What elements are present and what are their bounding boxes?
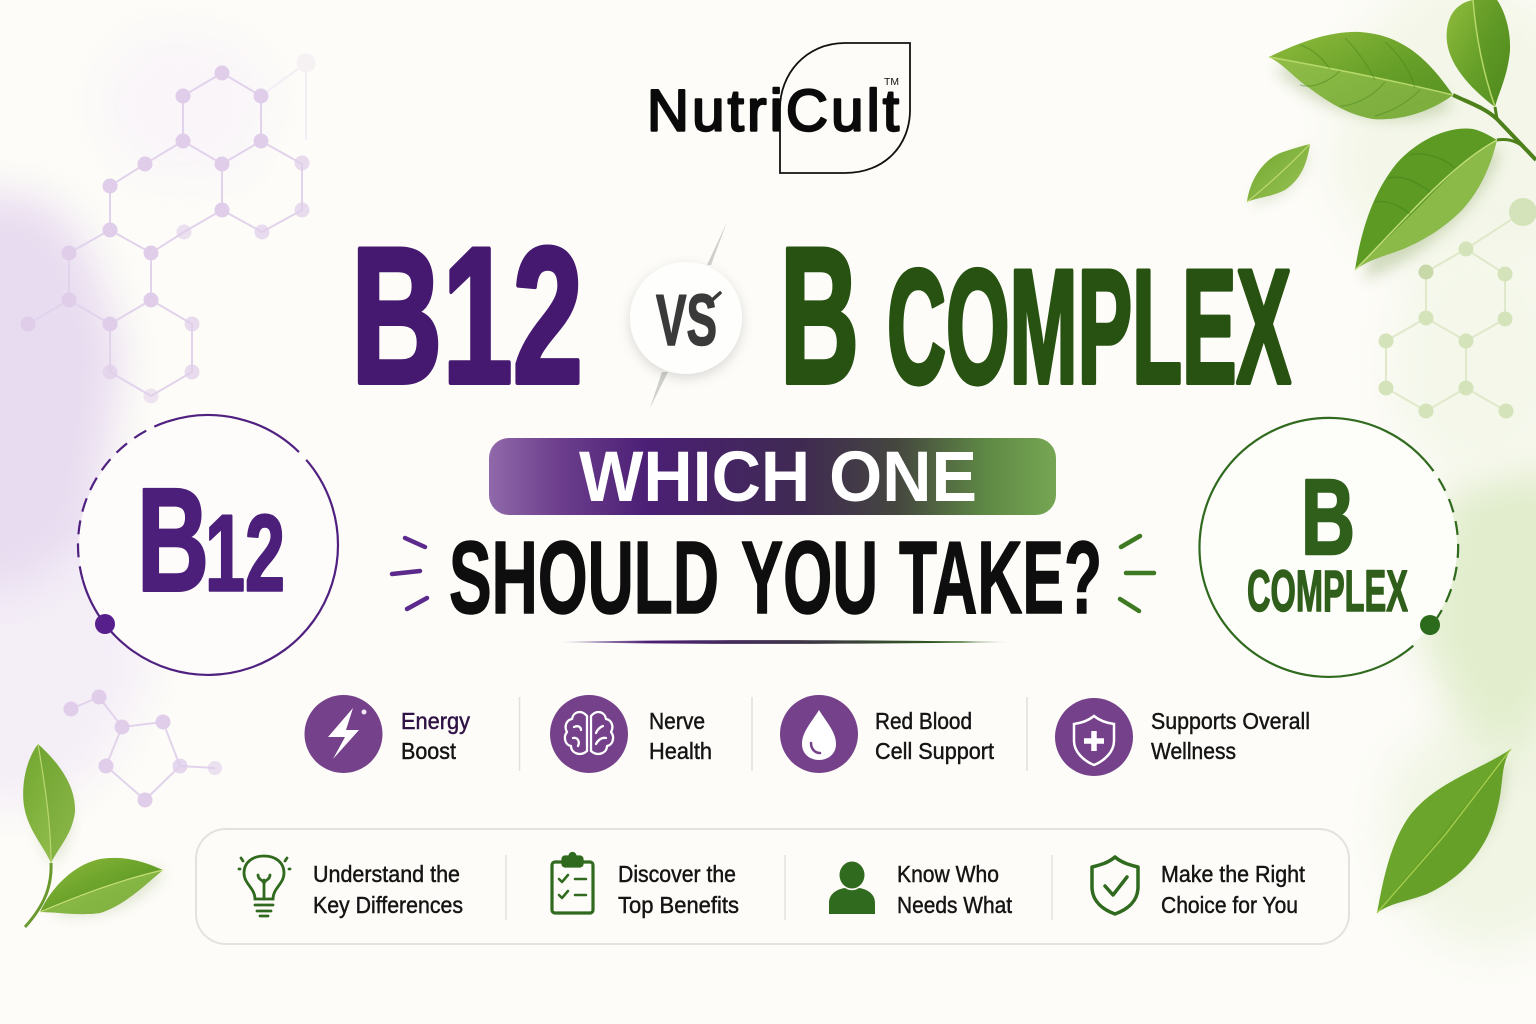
logo: NutriCult: NutriCult: [647, 78, 899, 144]
benefit: energy boost: [304, 695, 470, 773]
benefit: supports overall wellness: Wellness: [1151, 738, 1236, 764]
accent dashes: green: [1120, 536, 1154, 611]
vs badge: [630, 222, 742, 408]
highlight: key differences: Key Differences: [313, 892, 463, 918]
top right leaf branch: [1269, 0, 1536, 280]
icon: clipboard checklist: [552, 854, 593, 913]
benefit: nerve health: [550, 695, 712, 773]
molecule pattern: top left purple: [20, 54, 316, 404]
benefit: red blood cell support: Cell Support: [875, 738, 994, 764]
highlight: key differences: Understand the: [313, 861, 460, 887]
highlight: who needs what: [829, 861, 1012, 918]
benefit: red blood cell support: [780, 695, 994, 773]
headline: should you take: [449, 520, 1102, 635]
accent dashes: purple: [392, 538, 427, 609]
benefit dividers: [520, 697, 1027, 771]
bottom right leaf: [1377, 749, 1511, 913]
highlight: right choice: Make the Right: [1161, 861, 1305, 887]
benefit: energy boost: Energy: [401, 708, 470, 734]
icon: person: [829, 862, 875, 914]
benefit: nerve health: Health: [649, 738, 712, 764]
headline: should you take: TAKE?: [899, 520, 1102, 635]
benefit: energy boost: Boost: [401, 738, 456, 764]
benefit: nerve health: Nerve: [649, 708, 705, 734]
highlight: key differences: [239, 856, 463, 918]
headline pill: which one: WHICH ONE: [579, 438, 977, 517]
molecule pattern: right green: [1378, 198, 1536, 418]
icon: lightning bolt: [304, 695, 382, 773]
panel: bottom highlights: [196, 829, 1349, 944]
highlight: who needs what: Know Who: [897, 861, 999, 887]
icon: brain: [550, 695, 628, 773]
bottom left leaves: [23, 744, 165, 927]
highlight: top benefits: Discover the: [618, 861, 736, 887]
highlight: top benefits: Top Benefits: [618, 892, 739, 918]
benefit: supports overall wellness: Supports Overall: [1151, 708, 1310, 734]
highlight: right choice: [1092, 857, 1305, 918]
icon: check shield: [1092, 857, 1138, 914]
circle badge: B12: 12: [205, 492, 285, 614]
highlight: top benefits: [552, 854, 739, 918]
benefit: supports overall wellness: [1055, 698, 1310, 776]
headline underline: [560, 640, 1006, 644]
title: B12: B12: [351, 208, 583, 424]
logo: NutriCult: TM: [884, 76, 899, 88]
benefit: red blood cell support: Red Blood: [875, 708, 972, 734]
small floating leaf: [1247, 144, 1310, 205]
logo: NutriCult: [647, 43, 910, 173]
highlight: right choice: Choice for You: [1161, 892, 1298, 918]
circle badge: B complex: [1199, 418, 1458, 677]
icon: medical shield: [1055, 698, 1133, 776]
icon: blood drop: [780, 695, 858, 773]
circle badge: B12: [78, 415, 338, 675]
vs badge: VS: [656, 281, 717, 361]
icon: light bulb: [239, 856, 290, 916]
circle badge: B12: B: [137, 458, 209, 622]
headline: should you take: YOU: [741, 520, 878, 635]
title: B COMPLEX: [780, 208, 1291, 424]
headline: should you take: SHOULD: [449, 520, 719, 635]
title: B COMPLEX: B: [780, 208, 859, 424]
molecule pattern: lower left purple: [64, 690, 222, 808]
circle badge: B complex: COMPLEX: [1247, 559, 1408, 624]
circle badge: B complex: B: [1301, 456, 1355, 577]
highlight: who needs what: Needs What: [897, 892, 1012, 918]
